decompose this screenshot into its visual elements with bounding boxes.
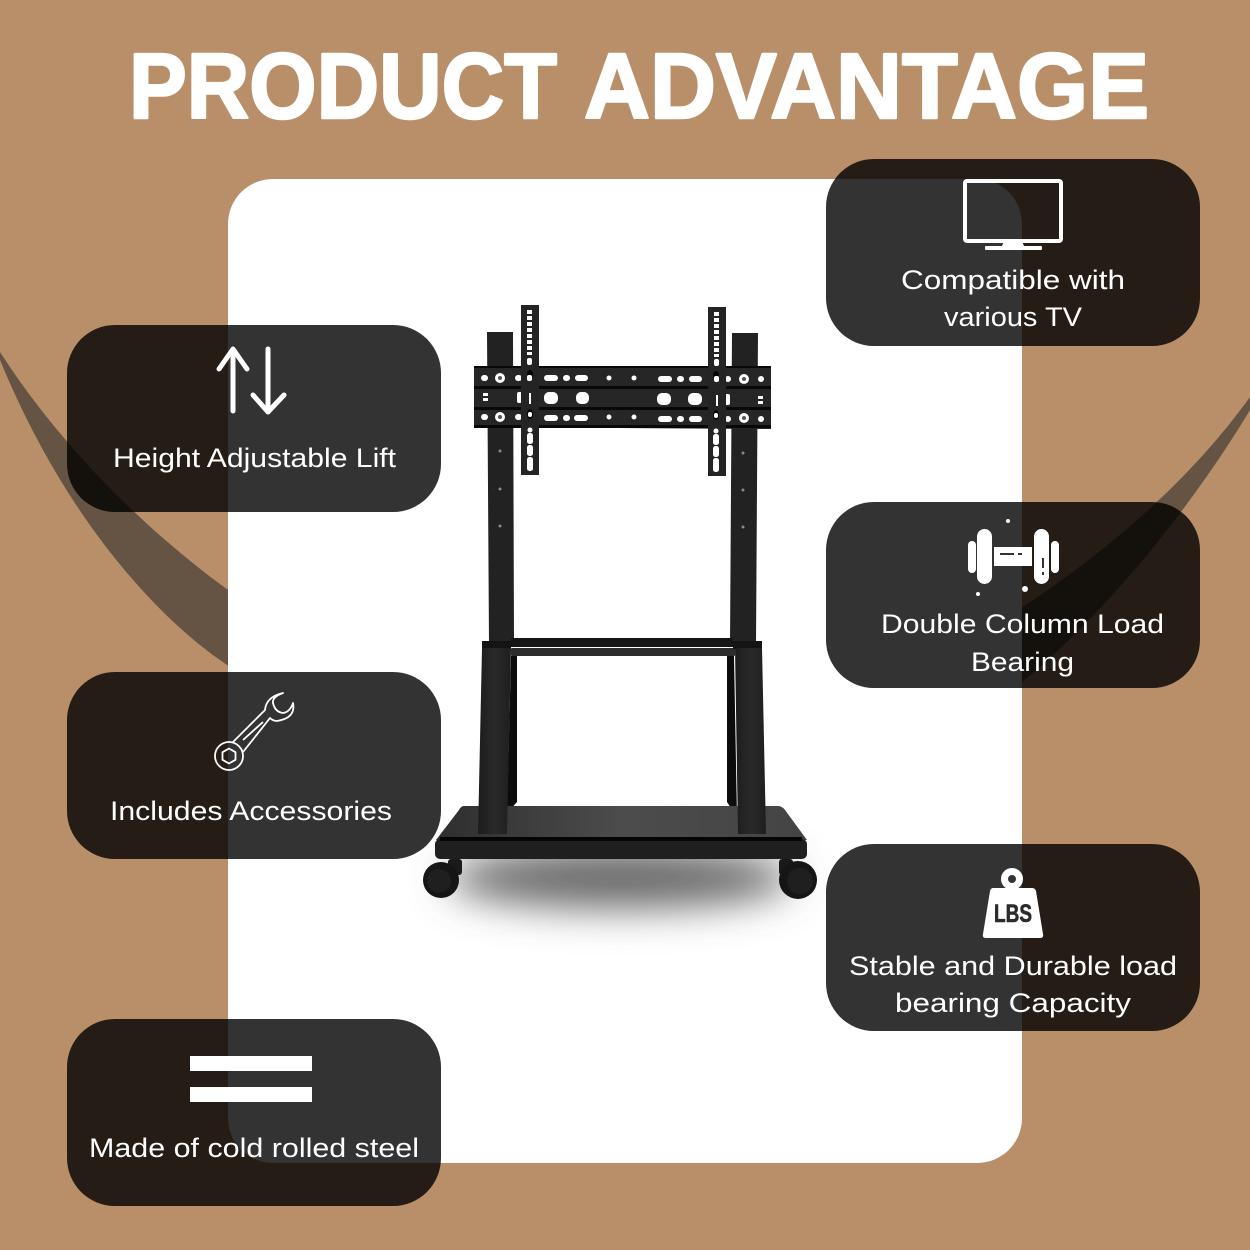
right caster xyxy=(779,859,817,899)
label: Includes Accessories xyxy=(110,796,392,826)
icon: TV xyxy=(965,181,1061,250)
label: Double Column Load xyxy=(881,609,1164,639)
plate holes xyxy=(481,373,764,423)
label: Stable and Durable load xyxy=(849,951,1177,981)
label xyxy=(849,951,1177,1018)
icon: steel bars xyxy=(190,1056,312,1102)
label: Height Adjustable Lift xyxy=(113,443,397,473)
icon: wrench xyxy=(215,693,293,770)
plate donut centres xyxy=(498,376,746,420)
label: Made of cold rolled steel xyxy=(89,1133,419,1163)
product: mobile TV stand xyxy=(423,305,817,908)
label: Bearing xyxy=(971,647,1074,677)
title xyxy=(129,34,1149,138)
right leg xyxy=(733,641,766,834)
left leg xyxy=(478,641,511,834)
left VESA arm xyxy=(521,305,539,475)
card: height adjustable lift xyxy=(67,325,441,512)
label: Compatible with xyxy=(901,265,1125,295)
base front xyxy=(435,837,807,859)
card: compatible with various TV xyxy=(826,159,1200,346)
left curved band xyxy=(0,352,235,670)
floor shadow xyxy=(448,848,792,908)
plate rails xyxy=(474,366,771,428)
left column xyxy=(487,332,514,644)
icon: dumbbell xyxy=(968,519,1059,596)
mounting plate xyxy=(474,366,771,429)
label xyxy=(881,609,1164,677)
card: includes accessories xyxy=(67,672,441,859)
icon: up and down arrows xyxy=(219,349,284,412)
column pin holes xyxy=(498,450,744,528)
icon: LBS weight: LBS xyxy=(994,900,1032,928)
inner braces xyxy=(507,656,737,817)
label xyxy=(901,265,1125,332)
right column xyxy=(730,333,758,644)
right VESA arm xyxy=(708,307,726,476)
card: stable and durable load xyxy=(826,844,1200,1031)
white product panel xyxy=(228,179,1022,1163)
base top xyxy=(436,806,807,840)
label: various TV xyxy=(944,302,1082,332)
label: bearing Capacity xyxy=(895,988,1132,1018)
card: cold rolled steel xyxy=(67,1019,441,1206)
icon: LBS weight xyxy=(983,872,1043,938)
card: double column load bearing xyxy=(826,502,1200,688)
left caster xyxy=(423,859,462,898)
right curved band xyxy=(1015,397,1250,688)
title: ADVANTAGE xyxy=(584,34,1149,138)
middle shelf xyxy=(511,638,735,656)
title: PRODUCT xyxy=(129,34,557,138)
